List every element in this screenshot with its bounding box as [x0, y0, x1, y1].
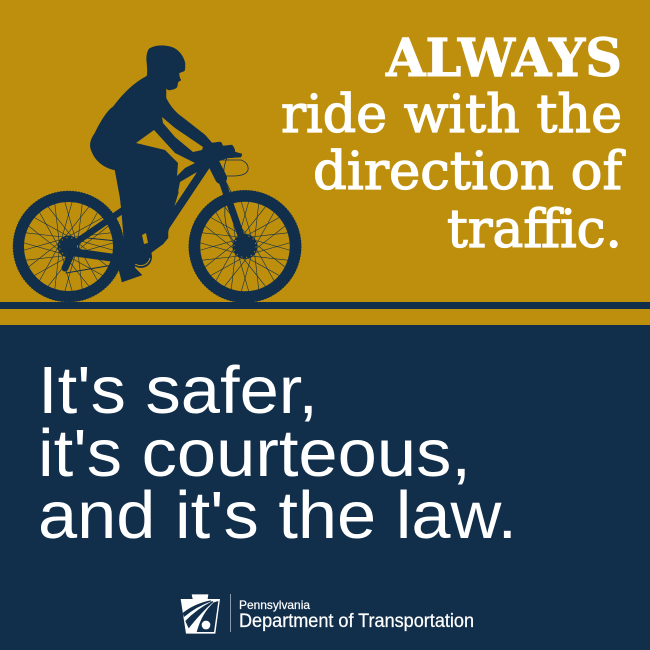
gap between arms — [162, 117, 203, 152]
text block: safety message — [38, 353, 517, 553]
text: direction of: direction of — [313, 142, 626, 202]
front wheel — [189, 190, 301, 302]
bike frame — [65, 158, 248, 273]
gap near pedal — [142, 233, 148, 244]
text: Department of Transportation: Department of Transportation — [239, 611, 474, 632]
panel: gold top background — [0, 0, 650, 325]
text: ride with the: ride with the — [281, 85, 622, 145]
gap between arm and thigh — [136, 130, 195, 176]
logo: PennDOT — [181, 594, 474, 634]
text: Pennsylvania: Pennsylvania — [239, 598, 310, 612]
road line — [0, 302, 650, 309]
panel: navy bottom background — [0, 325, 650, 650]
gap in frame triangle — [178, 172, 197, 192]
text: and it's the law.: and it's the law. — [38, 478, 517, 553]
icon: cyclist silhouette — [13, 46, 301, 303]
icon: keystone — [181, 594, 220, 634]
bike crank — [130, 246, 152, 268]
divider — [230, 594, 231, 632]
text block: headline — [281, 28, 626, 260]
rider body — [90, 46, 242, 282]
heading: ALWAYS: ALWAYS — [385, 28, 622, 89]
rear wheel — [13, 191, 124, 302]
text: It's safer,: It's safer, — [38, 353, 318, 428]
text: traffic.: traffic. — [447, 200, 622, 260]
text: it's courteous,: it's courteous, — [38, 416, 471, 491]
